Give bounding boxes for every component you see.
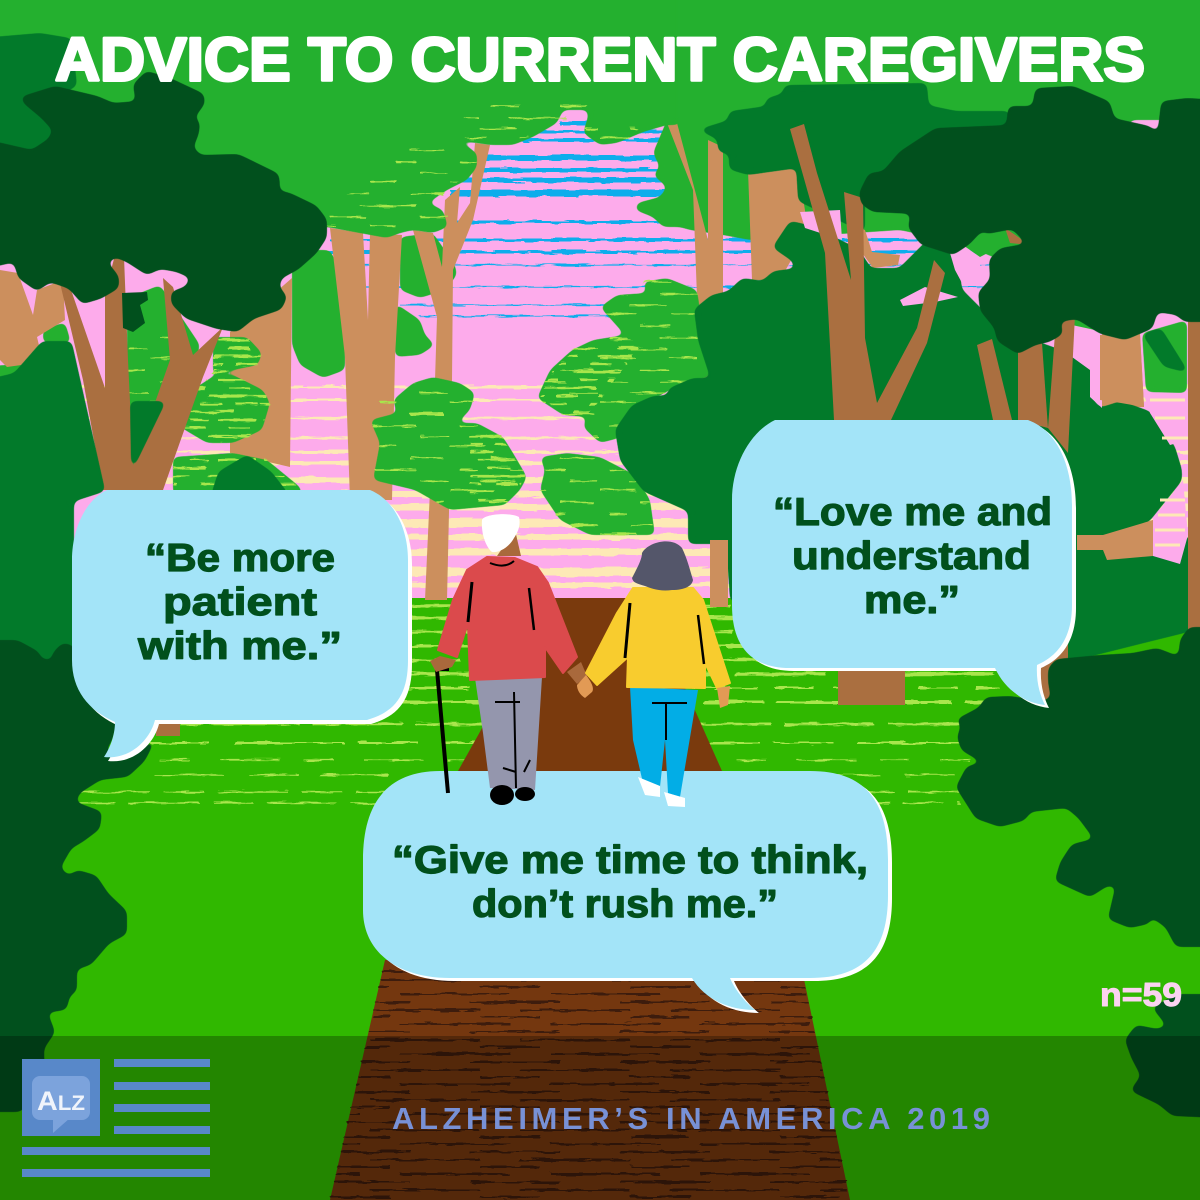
footer series title: ALZHEIMER’S IN AMERICA 2019 <box>392 1101 990 1136</box>
speech bubble: be more patient: “Be more <box>145 537 335 580</box>
ground <box>0 598 1200 1200</box>
speech bubble: be more patient: patient <box>163 581 317 624</box>
speech bubble: be more patient: with me.” <box>137 625 342 668</box>
sample size note: n=59 <box>1100 976 1182 1013</box>
man walking with cane <box>430 514 587 805</box>
center trunk segment <box>710 540 728 607</box>
speech bubble: give me time: “Give me time to think, <box>392 839 868 882</box>
speech bubble: give me time: don’t rush me.” <box>472 883 778 926</box>
path, upper section <box>458 598 722 771</box>
left canopy and top band <box>0 0 680 238</box>
openings in the right foliage <box>800 210 1188 564</box>
darkest canopy: top left <box>0 73 325 330</box>
darkest bush: lower right <box>958 629 1200 945</box>
speech bubble: love me: “Love me and <box>773 491 1052 534</box>
sketched lime foliage <box>128 102 710 535</box>
path, lower wooden section <box>330 960 850 1200</box>
title: ADVICE TO CURRENT CAREGIVERS <box>55 26 1145 94</box>
mid-green background foliage <box>0 0 1200 495</box>
darkest canopy: top right <box>861 88 1200 352</box>
darkest bush: lower left <box>0 642 152 1110</box>
speech bubble: love me: understand <box>792 535 1031 578</box>
speech bubble: love me <box>732 420 1076 708</box>
speech bubble: give me time <box>363 771 892 1013</box>
darkest bush: bottom corner <box>1127 996 1200 1116</box>
darkest patch beside left trunk <box>122 292 148 332</box>
mid-dark foliage, left <box>0 35 287 660</box>
footer band <box>0 1036 1200 1200</box>
speech bubble: love me: me.” <box>864 579 960 622</box>
woman holding hands <box>577 541 730 807</box>
logo: ALZ flag <box>22 1059 210 1177</box>
foreground tree trunks <box>60 124 1200 736</box>
speech bubble: be more patient <box>72 490 412 761</box>
mid-dark foliage, right <box>617 85 1188 660</box>
sky background <box>0 100 1200 620</box>
background trunks <box>0 123 1153 600</box>
logo: ALZ flag: ALZ <box>37 1086 85 1116</box>
